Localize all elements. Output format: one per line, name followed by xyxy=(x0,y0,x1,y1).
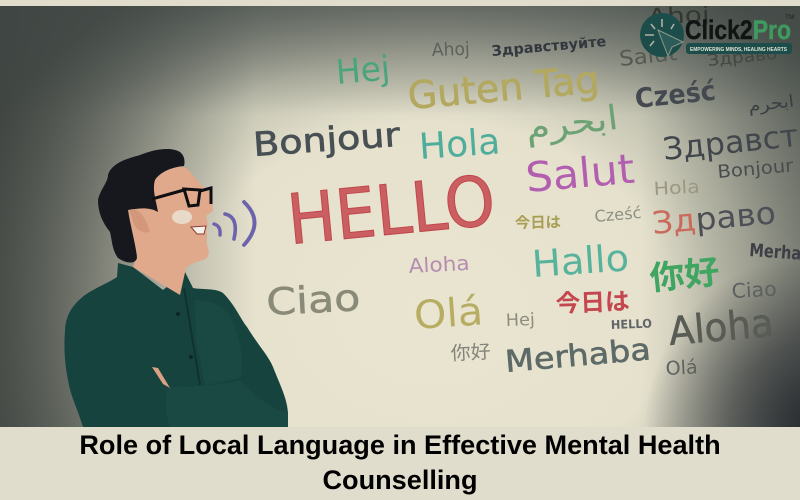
word cloud of greetings: 你好 xyxy=(450,337,491,366)
word cloud of greetings: Hej xyxy=(505,310,535,331)
face and neck xyxy=(128,167,213,295)
word cloud of greetings: Salut xyxy=(524,145,636,202)
word cloud of greetings: Здравст xyxy=(661,118,800,168)
word cloud of greetings: ابحرم xyxy=(523,98,620,149)
word cloud of greetings: Bonjour xyxy=(717,155,795,183)
cheek highlight xyxy=(172,210,192,224)
crossed hand xyxy=(152,367,170,388)
word cloud of greetings: HELLO xyxy=(284,161,499,261)
word cloud of greetings: Merhaba xyxy=(504,332,652,380)
hair xyxy=(98,149,185,263)
word cloud of greetings xyxy=(252,3,800,380)
title: Role of Local Language in Effective Mental Health xyxy=(79,429,721,460)
word cloud of greetings: Hej xyxy=(334,48,392,93)
title: Counselling xyxy=(322,464,478,495)
shirt placket and buttons xyxy=(176,288,200,385)
ear xyxy=(129,209,150,233)
word cloud of greetings: Здраво xyxy=(706,44,778,70)
word cloud of greetings: ابحرم xyxy=(747,92,795,117)
shirt xyxy=(64,263,288,427)
word cloud of greetings: 今日は xyxy=(515,211,561,233)
shirt chest highlight xyxy=(195,300,242,385)
word cloud of greetings: Olá xyxy=(665,356,698,380)
smile xyxy=(191,226,206,234)
folded forearm xyxy=(166,381,288,427)
word cloud of greetings: 你好 xyxy=(647,245,722,300)
word cloud of greetings: HELLO xyxy=(611,317,652,332)
word cloud of greetings: Bonjour xyxy=(252,115,402,164)
word cloud of greetings: Aloha xyxy=(667,301,775,355)
word cloud of greetings: Здравствуйте xyxy=(491,34,607,60)
word cloud of greetings: Hola xyxy=(653,177,700,200)
word cloud of greetings: Cześć xyxy=(594,203,642,226)
logo wordmark: Click2Pro xyxy=(685,15,791,45)
word cloud of greetings: Здраво xyxy=(651,195,777,242)
logo tagline xyxy=(686,43,792,54)
word cloud of greetings: Guten Tag xyxy=(406,57,601,118)
sound waves from mouth xyxy=(214,202,254,245)
word cloud of greetings: Olá xyxy=(413,289,485,339)
logo circle with cursor xyxy=(640,13,684,57)
word cloud of greetings: Ahoj xyxy=(431,39,470,61)
glasses xyxy=(152,188,211,206)
word cloud of greetings: 今日は xyxy=(555,281,630,319)
word cloud of greetings: Hola xyxy=(418,121,501,168)
word cloud of greetings: Salut xyxy=(618,41,678,71)
trademark: TM xyxy=(785,14,794,21)
word cloud of greetings: Ciao xyxy=(731,277,777,303)
word cloud of greetings: Aloha xyxy=(408,251,470,278)
logo: Click2Pro xyxy=(640,13,794,57)
word cloud of greetings: Cześć xyxy=(633,76,717,115)
word cloud of greetings: Hallo xyxy=(531,236,630,286)
title xyxy=(79,429,721,495)
word cloud of greetings: Ciao xyxy=(265,276,361,324)
man in green shirt xyxy=(64,149,288,427)
